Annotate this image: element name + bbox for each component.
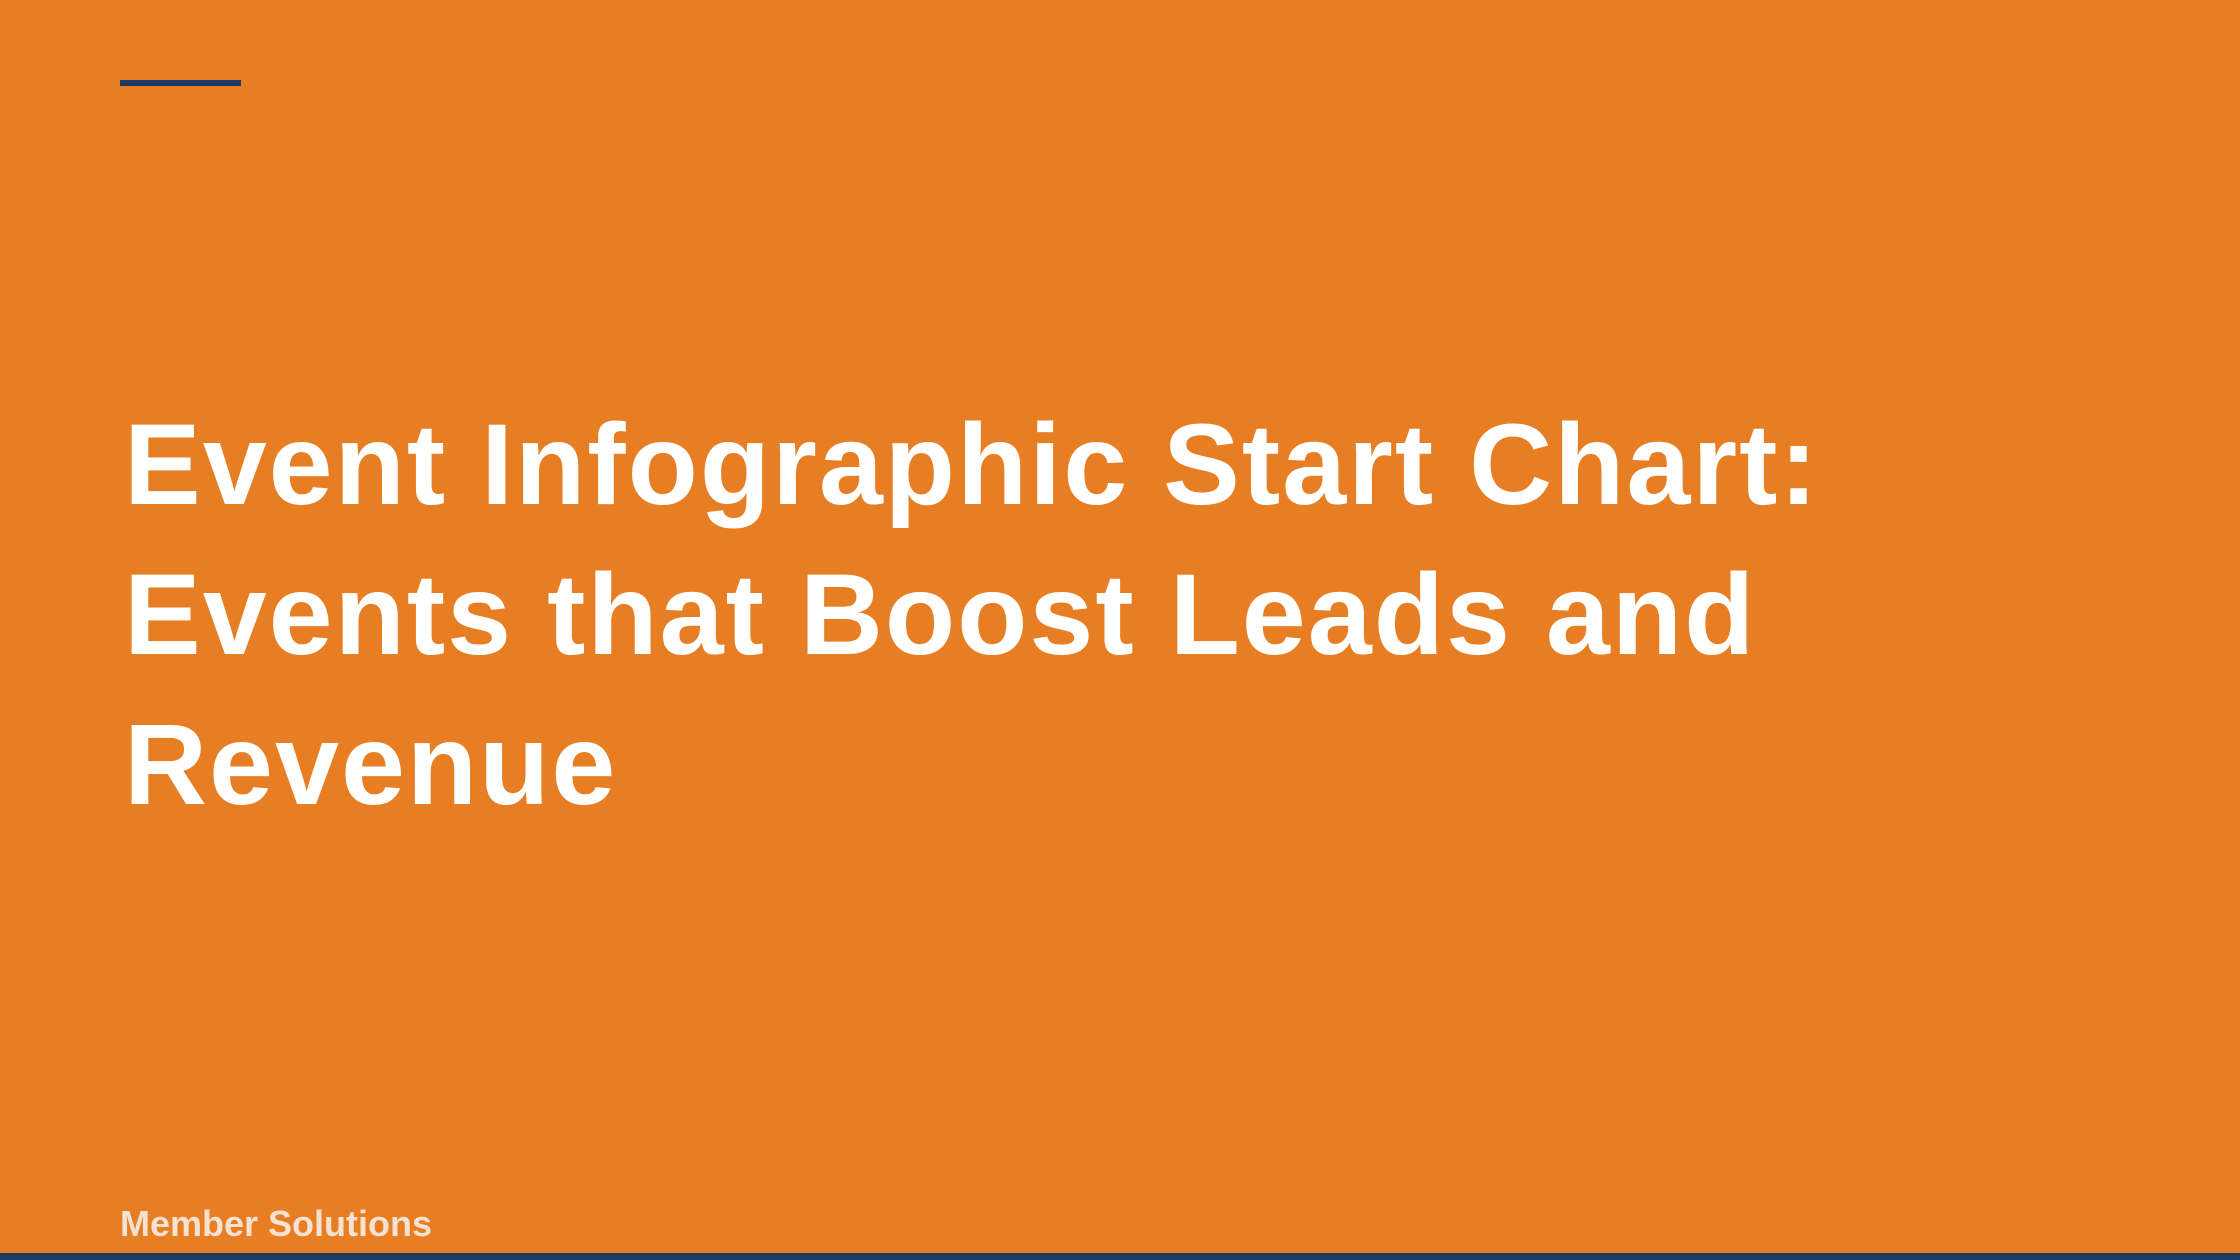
title: Events that Boost Leads and [124, 551, 1756, 679]
bottom bar [0, 1253, 2240, 1260]
accent line [120, 80, 241, 86]
footer: brand name: Member Solutions [120, 1203, 432, 1244]
title: Revenue [124, 701, 617, 829]
title [124, 401, 1820, 829]
title: Event Infographic Start Chart: [124, 401, 1820, 529]
